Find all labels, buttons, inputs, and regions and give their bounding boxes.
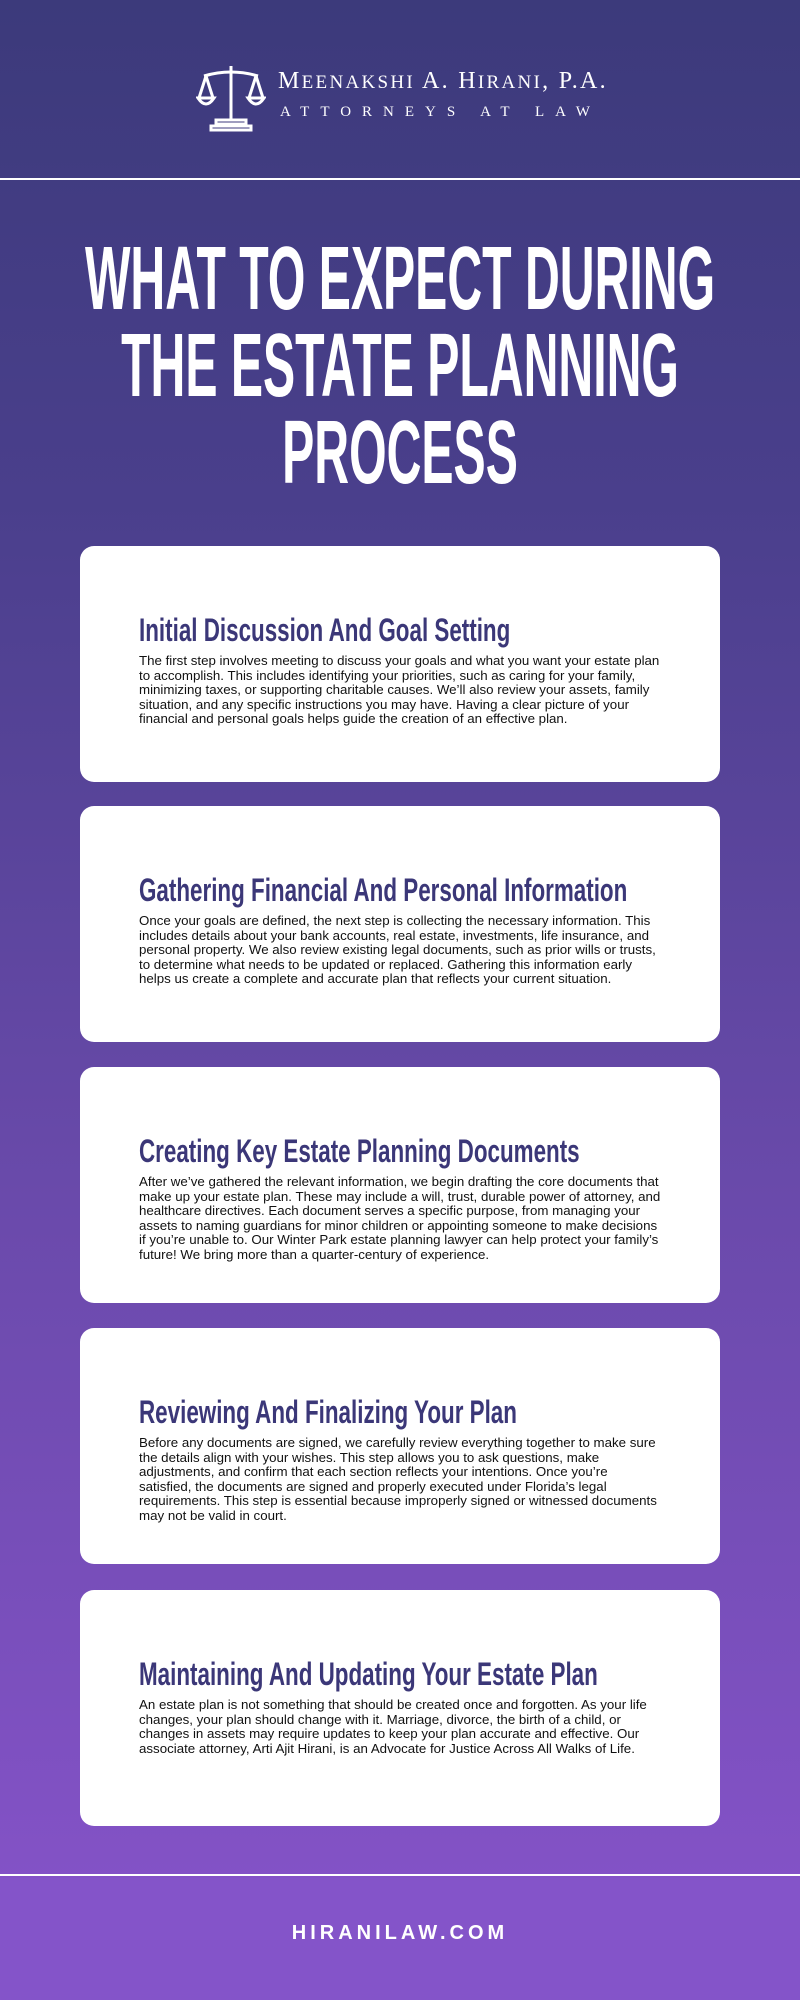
tagline: ATTORNEYS AT LAW	[280, 104, 601, 120]
panel: maintaining and updating	[80, 1590, 720, 1826]
title: PROCESS	[282, 403, 518, 503]
title	[85, 229, 715, 503]
text block: Before any documents are signed, we carefully review everything together to make sure the details align with your wishes. This step allows you to ask questions, make adjustments, and confirm that each section reflects your intentions. Once you’re satisfied, the documents are signed and properly executed under Florida’s legal requirements. This step is essential because improperly signed or witnessed documents may not be valid in court.	[139, 1435, 657, 1522]
text block: The first step involves meeting to discuss your goals and what you want your estate plan to accomplish. This includes identifying your priorities, such as caring for your family, minimizing taxes, or supporting charitable causes. We’ll also review your assets, family situation, and any specific instructions you may have. Having a clear picture of your financial and personal goals helps guide the creation of an effective plan.	[139, 653, 659, 726]
panel: gathering information	[80, 806, 720, 1042]
firm name: MEENAKSHI A. HIRANI, P.A.	[278, 68, 608, 94]
title: THE ESTATE PLANNING	[121, 316, 679, 416]
footer	[0, 1878, 800, 2000]
panel: creating documents	[80, 1067, 720, 1303]
heading: Initial Discussion And Goal Setting	[139, 612, 510, 648]
text block: An estate plan is not something that should be created once and forgotten. As your life changes, your plan should change with it. Marriage, divorce, the birth of a child, or changes in assets may require updates to keep your plan accurate and effective. Our associate attorney, Arti Ajit Hirani, is an Advocate for Justice Across All Walks of Life.	[139, 1697, 647, 1756]
header logo	[196, 66, 608, 132]
heading: Reviewing And Finalizing Your Plan	[139, 1394, 517, 1430]
text block: Once your goals are defined, the next step is collecting the necessary information. This includes details about your bank accounts, real estate, investments, life insurance, and personal property. We also review existing legal documents, such as prior wills or trusts, to determine what needs to be updated or replaced. Gathering this information early helps us create a complete and accurate plan that reflects your current situation.	[139, 913, 656, 986]
heading: Creating Key Estate Planning Documents	[139, 1133, 580, 1169]
text block: After we’ve gathered the relevant information, we begin drafting the core documents that make up your estate plan. These may include a will, trust, durable power of attorney, and healthcare directives. Each document serves a specific purpose, from managing your assets to naming guardians for minor children or appointing someone to make decisions if you’re unable to. Our Winter Park estate planning lawyer can help protect your family’s future! We bring more than a quarter-century of experience.	[139, 1174, 660, 1262]
website: HIRANILAW.COM	[292, 1922, 508, 1944]
heading: Gathering Financial And Personal Information	[139, 872, 627, 908]
heading: Maintaining And Updating Your Estate Plan	[139, 1656, 598, 1692]
title: WHAT TO EXPECT DURING	[85, 229, 715, 329]
panel: reviewing and finalizing	[80, 1328, 720, 1564]
icon: scales of justice	[196, 66, 266, 132]
panel: initial discussion	[80, 546, 720, 782]
